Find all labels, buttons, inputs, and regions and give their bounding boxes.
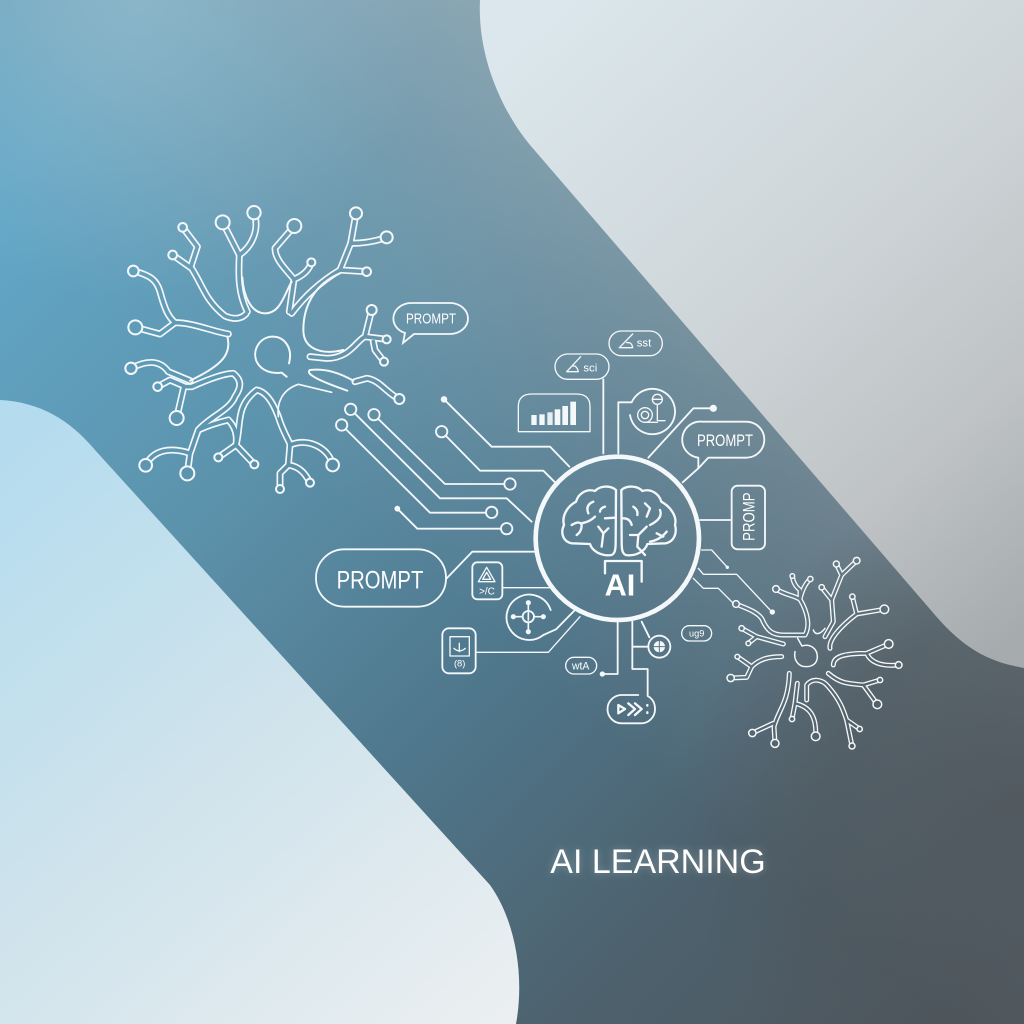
speech bubble: PROMPT right: [682, 422, 764, 482]
icon card: device: [442, 617, 580, 673]
large neuron: [125, 206, 404, 493]
pill: PROMPT: [316, 549, 535, 607]
circuit lines: left: [336, 397, 569, 534]
small neuron: [727, 557, 902, 749]
pill: arrows: [607, 622, 655, 723]
pill: ug9: ug9: [689, 628, 704, 638]
icon: globe: [632, 622, 670, 658]
pill: sst: [609, 331, 662, 356]
connectors: lower right: [693, 550, 775, 615]
speech bubble: PROMPT: PROMPT: [406, 312, 456, 328]
pill: sci: [555, 354, 609, 453]
speech bubble: PROMPT right: PROMPT: [697, 431, 753, 450]
icon: circle instrument: [618, 389, 675, 453]
label: AI: AI: [605, 569, 635, 603]
icon card: device: (8): [454, 659, 465, 669]
circuit network and AI hub: [316, 331, 775, 723]
decorative panel: top right: [480, 0, 1024, 668]
pill: wta: [566, 622, 618, 676]
AI hub circle: [536, 457, 699, 620]
icon: brain: [562, 487, 676, 582]
bar chart card: [518, 394, 590, 432]
title: AI LEARNING: AI LEARNING: [550, 843, 766, 881]
vertical card: PROMP: PROMP: [739, 492, 758, 541]
speech bubble: PROMPT: [393, 303, 468, 343]
pill: wta: wtA: [571, 660, 590, 672]
icon card: triangle: [472, 562, 550, 599]
vertical card: PROMP: [700, 486, 765, 549]
title: AI LEARNING: AI LEARNING: [550, 843, 766, 881]
pill: sst: sst: [637, 338, 652, 350]
pill: ug9: [682, 626, 712, 641]
pill: sci: sci: [583, 362, 597, 374]
icon: compass circle: [507, 595, 575, 640]
decorative panel: bottom left: [0, 400, 519, 1024]
icon card: triangle: >/C: [479, 587, 495, 598]
pill: PROMPT: PROMPT: [337, 567, 423, 594]
connector: dot top right: [648, 406, 716, 458]
